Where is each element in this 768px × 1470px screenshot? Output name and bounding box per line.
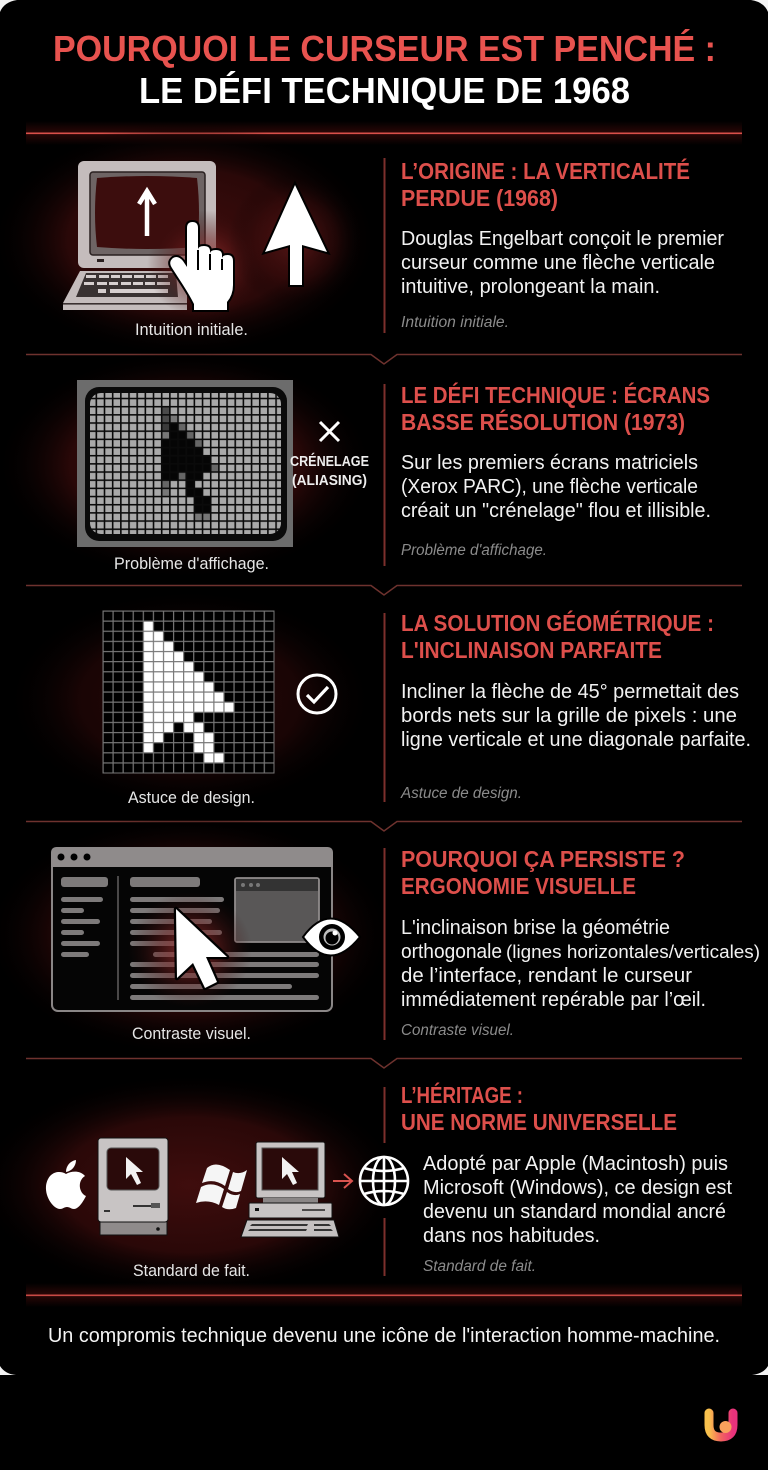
panel: origine [0, 122, 724, 358]
icon: eye [303, 918, 360, 956]
icon: apple [46, 1160, 86, 1209]
icon: cross [320, 422, 339, 441]
illustration: computer and hand [0, 122, 380, 358]
panel: héritage [0, 1073, 732, 1297]
icon: check [298, 675, 336, 713]
title [53, 28, 716, 111]
footer text: Un compromis technique devenu une icône de l'interaction homme-machine. [48, 1324, 720, 1347]
bottom divider [26, 1283, 742, 1307]
small window [235, 878, 319, 942]
text block: défi: BASSE RÉSOLUTION (1973) [401, 409, 685, 435]
text block: héritage [384, 1082, 732, 1276]
text block: défi [384, 382, 711, 566]
background glow [0, 1073, 405, 1297]
pixel arrow [143, 621, 234, 763]
text block: persistance [384, 846, 760, 1040]
text block: solution: Astuce de design. [400, 785, 522, 802]
caption: standard: Standard de fait. [133, 1262, 250, 1280]
text block: origine: Intuition initiale. [401, 314, 509, 331]
text block: héritage: UNE NORME UNIVERSELLE [401, 1109, 677, 1135]
label: crénelage: (ALIASING) [292, 473, 367, 489]
icon: globe [360, 1157, 408, 1205]
text block: origine: Douglas Engelbart conçoit le premier [401, 227, 724, 250]
text block: origine: curseur comme une flèche verticale [401, 251, 715, 274]
text block: défi: LE DÉFI TECHNIQUE : ÉCRANS [401, 382, 710, 408]
icon: macintosh [98, 1138, 168, 1235]
divider 1 [26, 354, 742, 364]
text block: solution: L'INCLINAISON PARFAITE [401, 637, 662, 663]
text block: héritage: Adopté par Apple (Macintosh) puis [423, 1152, 728, 1175]
text block: solution: LA SOLUTION GÉOMÉTRIQUE : [401, 610, 714, 636]
text block: solution [384, 610, 751, 802]
label: crénelage [290, 453, 369, 489]
top divider [26, 121, 742, 145]
text block: défi: (Xerox PARC), une flèche verticale [401, 475, 698, 498]
divider 3 [26, 822, 742, 831]
icon: hand pointer [170, 222, 233, 310]
panel: solution [5, 588, 751, 812]
icon: windows [196, 1164, 247, 1209]
text block: persistance: ERGONOMIE VISUELLE [401, 873, 636, 899]
divider 2 [26, 586, 742, 595]
text block: persistance: L'inclinaison brise la géométrie [401, 916, 670, 939]
caption: intuition: Intuition initiale. [135, 321, 248, 339]
panel: ergonomie [0, 813, 760, 1057]
text block: solution: Incliner la flèche de 45° permettait des [401, 680, 739, 703]
icon: vertical arrow [228, 172, 364, 308]
text block: persistance: orthogonale [401, 940, 502, 963]
title: POURQUOI LE CURSEUR EST PENCHÉ : [53, 28, 716, 69]
text block: héritage: Microsoft (Windows), ce design est [423, 1176, 732, 1199]
text block: persistance: immédiatement repérable par l’œil. [401, 988, 706, 1011]
arrow: to globe [333, 1174, 352, 1188]
icon: tilted cursor [176, 909, 227, 988]
caption: astuce: Astuce de design. [128, 789, 255, 807]
text block: défi: Problème d'affichage. [401, 542, 547, 559]
text block: héritage: devenu un standard mondial ancré [423, 1200, 726, 1223]
text block: persistance: de l’interface, rendant le curseur [401, 964, 692, 987]
text block: origine [384, 158, 724, 333]
illustration: pixel grid [5, 588, 375, 812]
caption: affichage: Problème d'affichage. [114, 555, 269, 573]
text block: solution: bords nets sur la grille de pixels : une [401, 704, 737, 727]
text block: persistance: POURQUOI ÇA PERSISTE ? [401, 846, 685, 872]
icon: pc [241, 1142, 339, 1237]
text block: héritage: Standard de fait. [423, 1258, 536, 1275]
illustration: interface window [0, 813, 395, 1057]
text block: solution: ligne verticale et une diagonale parfaite. [401, 728, 751, 751]
text block: défi: créait un "crénelage" flou et illisible. [401, 499, 711, 522]
illustration: pixel screen [28, 354, 342, 560]
text block: héritage: dans nos habitudes. [423, 1224, 600, 1247]
text block: origine: L’ORIGINE : LA VERTICALITÉ [401, 158, 690, 184]
label: crénelage: CRÉNELAGE [290, 453, 369, 470]
text block: origine: PERDUE (1968) [401, 185, 558, 211]
logo [709, 1413, 733, 1437]
panel: défi technique [0, 350, 711, 580]
title: LE DÉFI TECHNIQUE DE 1968 [139, 70, 630, 111]
text block: persistance: Contraste visuel. [401, 1022, 514, 1039]
text block: persistance: (lignes horizontales/verticales) [506, 942, 760, 962]
divider 4 [26, 1058, 742, 1068]
caption: contraste: Contraste visuel. [132, 1025, 251, 1043]
text block: défi: Sur les premiers écrans matriciels [401, 451, 698, 474]
text block: héritage: L’HÉRITAGE : [401, 1082, 523, 1108]
text block: origine: intuitive, prolongeant la main. [401, 275, 660, 298]
pixel cursor [162, 407, 219, 521]
